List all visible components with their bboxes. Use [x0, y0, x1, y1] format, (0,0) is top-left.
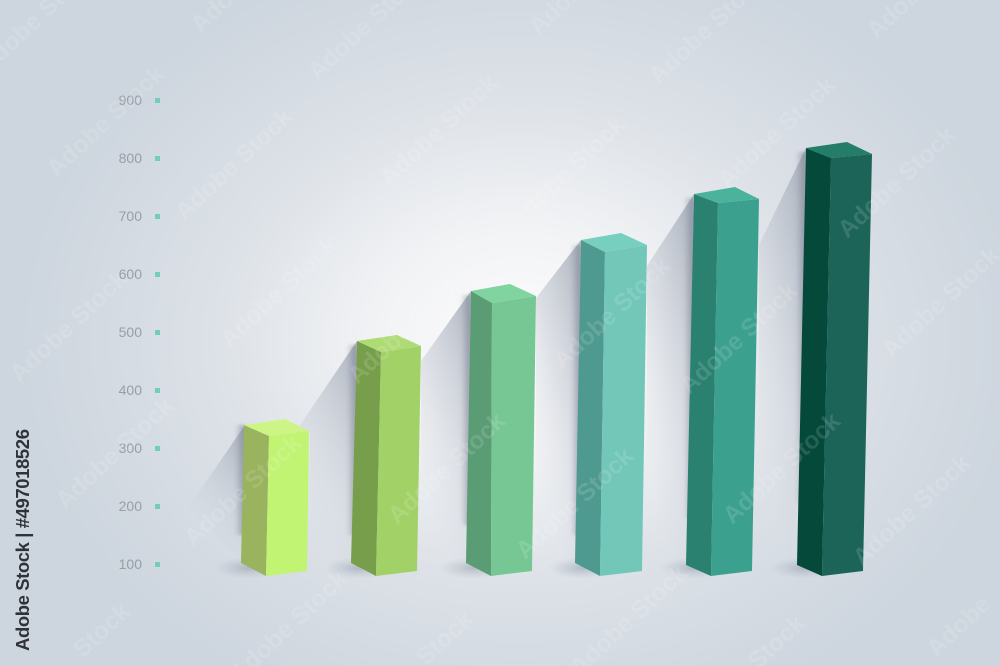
bar 1	[241, 419, 309, 576]
axis labels and tick markers: 300	[119, 440, 142, 456]
axis labels and tick markers: 900	[119, 92, 142, 108]
stock watermarks: Adobe Stock	[848, 449, 976, 571]
stock watermarks: Adobe	[922, 591, 996, 662]
stock watermarks: Adobe Stock	[179, 429, 307, 551]
stock watermarks: Adobe Stock	[215, 231, 343, 353]
axis labels and tick markers: 400	[119, 382, 142, 398]
stock watermarks: Adobe Stock	[343, 267, 471, 389]
stock id side text: Adobe Stock | #497018526	[12, 429, 33, 651]
axis labels and tick markers: 700	[119, 208, 142, 224]
stock watermarks: Adobe Stock	[675, 277, 803, 399]
stock watermarks: Adobe Stock	[503, 111, 631, 233]
stock watermarks: Adobe Stock	[375, 69, 503, 191]
stock watermarks: Adobe Stock	[383, 407, 511, 529]
bar 6	[797, 142, 872, 576]
stock watermarks: Adobe Stock	[511, 442, 639, 564]
axis labels and tick markers: 600	[119, 266, 142, 282]
stock watermarks: Stock	[68, 598, 136, 663]
bar 3	[466, 284, 536, 576]
stock watermarks: Adobe Stock	[51, 392, 179, 514]
axis labels and tick markers: 500	[119, 324, 142, 340]
stock watermarks: Adobe Stock	[718, 407, 846, 529]
bar 4	[575, 233, 647, 576]
axis labels and tick markers	[119, 92, 160, 572]
stock watermarks: Adobe Stock	[833, 121, 961, 243]
cast shadows	[188, 148, 838, 579]
axis labels and tick markers: 800	[119, 150, 142, 166]
bar 5	[686, 187, 759, 576]
axis labels and tick markers: 100	[119, 556, 142, 572]
stock watermarks: Adobe Stock	[548, 252, 676, 374]
stock watermarks: Adobe Stock	[42, 60, 170, 182]
stock watermarks: Adobe Stock	[5, 265, 133, 387]
stock watermarks: Adobe Stock	[170, 103, 298, 225]
bar 2	[351, 335, 421, 576]
stock watermarks: Adobe Stock	[713, 71, 841, 193]
axis labels and tick markers: 200	[119, 498, 142, 514]
